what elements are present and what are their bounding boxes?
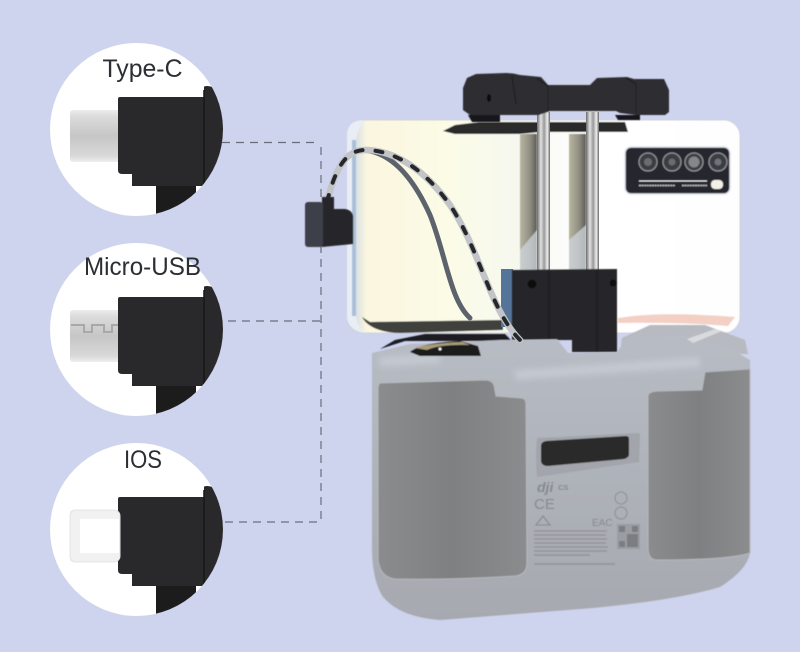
regulatory label: CE bbox=[534, 496, 555, 513]
regulatory label: EAC bbox=[592, 518, 613, 529]
dashed connector lines bbox=[222, 142, 321, 522]
top clamp bbox=[463, 73, 669, 122]
rainbow reflection bbox=[618, 314, 735, 326]
label: Type-C: Type-C bbox=[102, 55, 182, 83]
label: IOS: IOS bbox=[124, 446, 162, 474]
right joystick bbox=[687, 329, 722, 343]
blue side of block bbox=[501, 269, 513, 327]
left grip bbox=[378, 380, 527, 579]
steel rods bbox=[537, 112, 599, 272]
cables bbox=[327, 150, 520, 340]
icon: Micro-USB connector bbox=[70, 286, 226, 425]
gold button bbox=[410, 341, 481, 356]
right-angle plug on phone bbox=[305, 197, 353, 247]
panel: Micro-USB bbox=[50, 243, 226, 425]
camera module bbox=[625, 147, 730, 194]
rod reflections bbox=[520, 134, 586, 270]
lower block bbox=[512, 269, 617, 352]
lenses bbox=[639, 153, 727, 171]
warning mark bbox=[536, 516, 550, 525]
panel: Type-C bbox=[50, 43, 226, 225]
top ridge bbox=[380, 358, 700, 375]
regulatory label bbox=[534, 479, 640, 564]
braided cable bbox=[327, 150, 520, 340]
thin cable bbox=[363, 150, 470, 318]
phone holder bbox=[463, 73, 669, 352]
speaker grille bbox=[536, 433, 640, 477]
icon: Lightning connector bbox=[70, 486, 226, 625]
right grip bbox=[648, 369, 750, 560]
controller bbox=[372, 325, 750, 620]
dji logo: dji bbox=[537, 479, 554, 495]
fine print bbox=[534, 531, 615, 564]
infographic canvas bbox=[50, 43, 751, 620]
controller body bbox=[372, 335, 750, 620]
panel: IOS bbox=[50, 443, 226, 625]
regulatory label: CS bbox=[558, 483, 568, 492]
phone bbox=[347, 120, 740, 333]
clamp shadow on phone bbox=[443, 122, 628, 134]
camera strip bbox=[639, 180, 707, 182]
icon: Type-C connector bbox=[70, 86, 226, 225]
label: Micro-USB: Micro-USB bbox=[84, 253, 201, 281]
shadow under phone bbox=[380, 334, 512, 349]
QR code bbox=[617, 524, 640, 549]
